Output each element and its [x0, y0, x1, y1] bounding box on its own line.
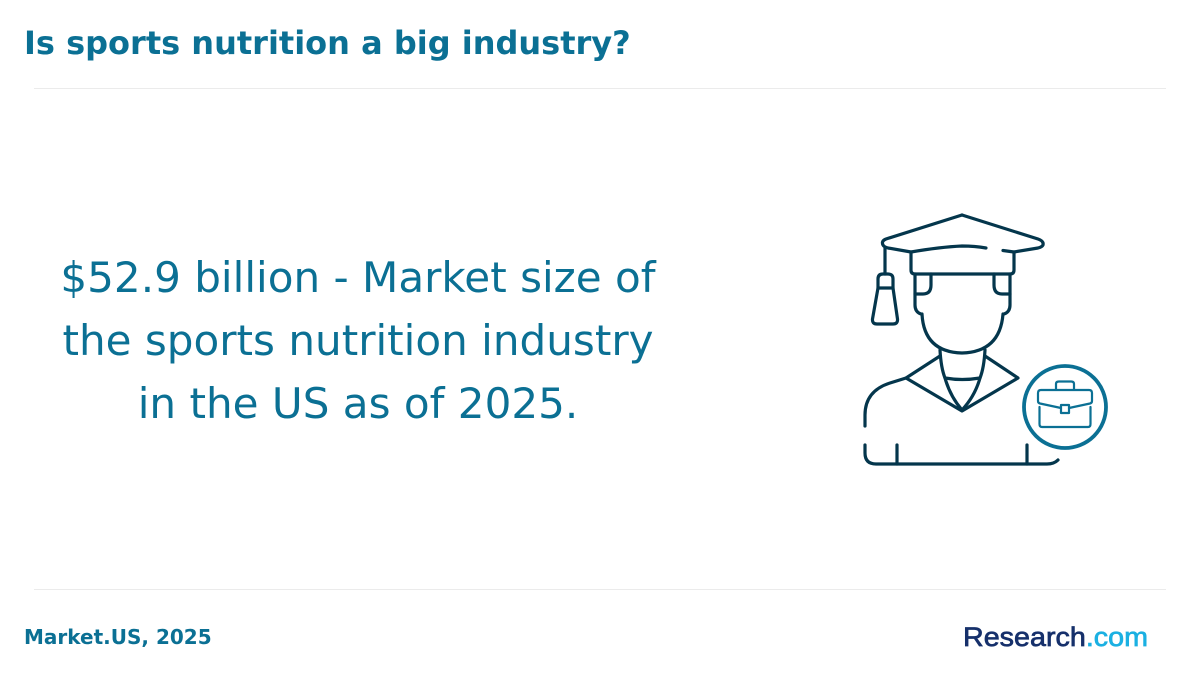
- logo: Research.com: Research .com: [963, 622, 1148, 652]
- main statistic text: the sports nutrition industry: [62, 316, 654, 365]
- main statistic text: [60, 253, 656, 428]
- main statistic text: $52.9 billion - Market size of: [60, 253, 656, 302]
- icon: briefcase badge: [1024, 366, 1106, 448]
- icon: graduate figure: [865, 215, 1058, 464]
- title: Is sports nutrition a big industry?: [24, 24, 631, 62]
- main statistic text: in the US as of 2025.: [138, 379, 578, 428]
- icon: graduate with briefcase: [863, 213, 1108, 466]
- source citation: Market.US, 2025: [24, 625, 212, 649]
